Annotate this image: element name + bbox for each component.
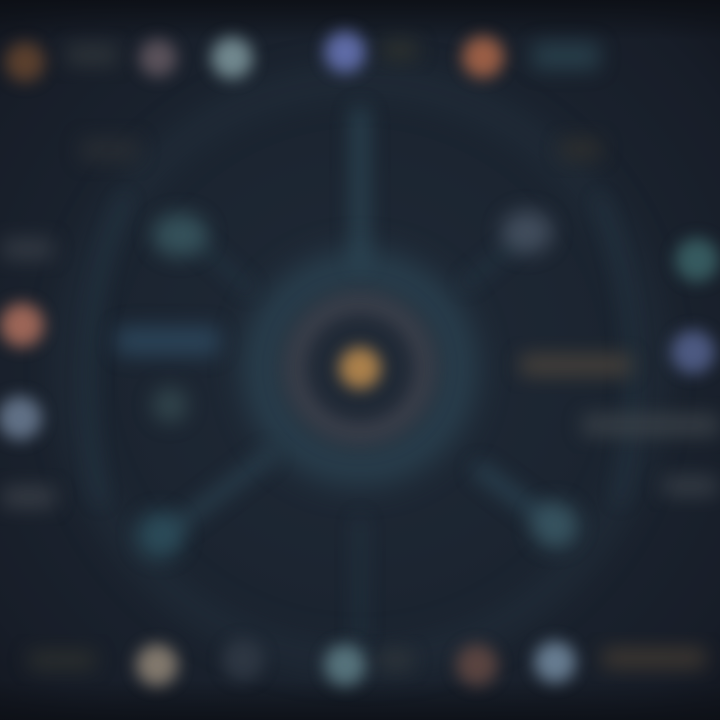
- label: [28, 650, 96, 670]
- label: [2, 238, 54, 260]
- icon: teal: [675, 238, 719, 282]
- icon: pale teal: [211, 37, 253, 79]
- icon: blue-grey: [534, 641, 576, 683]
- label: [66, 44, 118, 66]
- label: left blue: [116, 326, 220, 356]
- right column: [520, 238, 720, 496]
- label: [380, 650, 412, 670]
- hub inner ring: [295, 303, 425, 433]
- central hub: [262, 270, 458, 466]
- label: upper left faint: [80, 138, 140, 162]
- icon: blue-grey: [0, 396, 42, 440]
- left column: [0, 238, 56, 508]
- outer orbit ring: [70, 80, 650, 660]
- label: [382, 40, 418, 60]
- label: upper right faint: [560, 138, 602, 160]
- connector lines: [89, 115, 631, 640]
- icon: brown: [456, 644, 498, 686]
- node: upper left: [152, 213, 208, 257]
- icon: mauve: [139, 39, 177, 77]
- icon: blue: [671, 330, 715, 374]
- label: grey: [582, 414, 720, 436]
- label: brown: [520, 354, 632, 376]
- hub core: [339, 347, 381, 389]
- top row: [5, 31, 600, 82]
- label: [2, 486, 56, 508]
- label: brown: [602, 648, 706, 668]
- icon: blue: [324, 31, 366, 73]
- icon: tan: [136, 644, 178, 686]
- node: upper right: [501, 210, 553, 254]
- hub outer ring: [262, 270, 458, 466]
- bottom row: [28, 639, 706, 686]
- mid-level nodes: [80, 138, 602, 559]
- icon: salmon: [0, 303, 44, 347]
- node: lower left: [136, 511, 184, 559]
- icon: dim: [222, 639, 264, 681]
- icon: brown: [5, 42, 45, 82]
- icon: teal: [324, 644, 366, 686]
- node: lower right: [531, 501, 579, 549]
- node: left lower: [152, 387, 188, 423]
- label: teal: [532, 42, 600, 70]
- icon: orange: [462, 36, 504, 78]
- label: grey short: [662, 476, 718, 496]
